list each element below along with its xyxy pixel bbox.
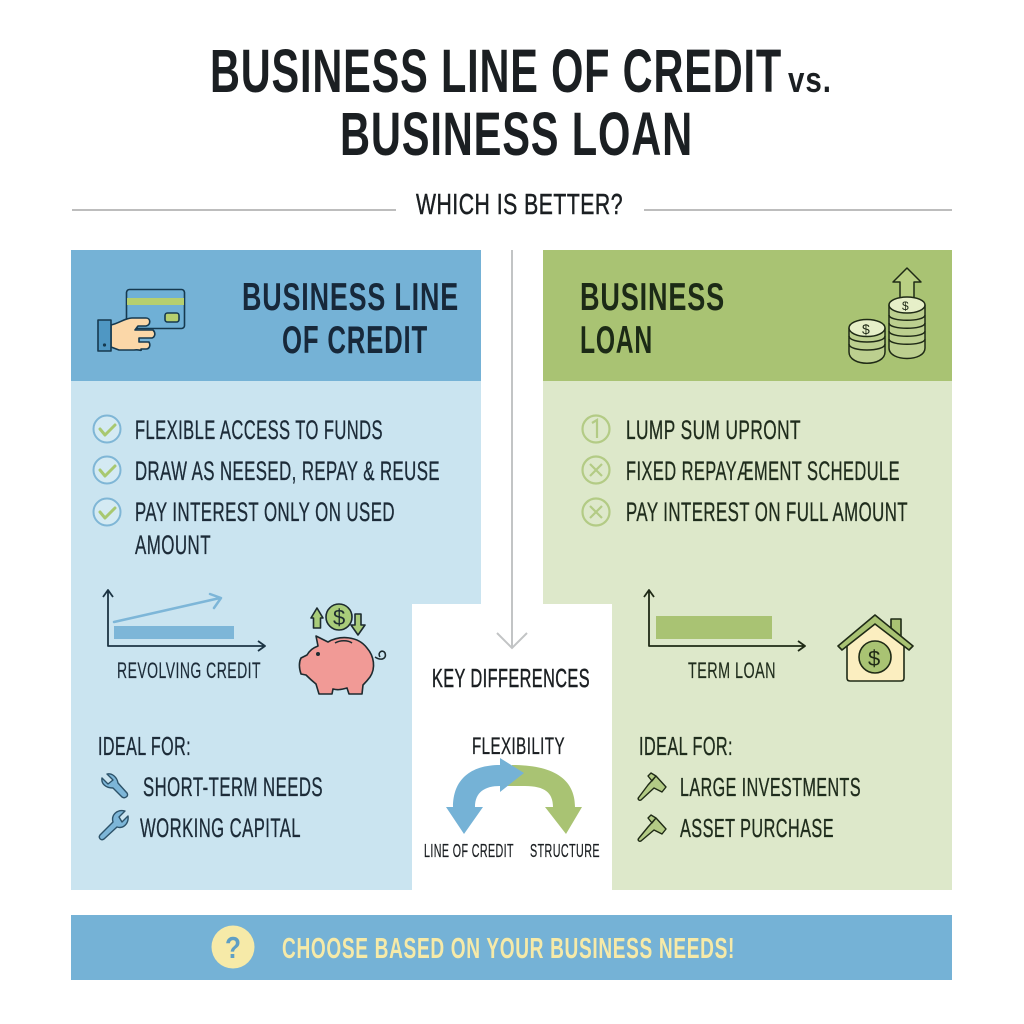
heading: business loan: BUSINESS bbox=[580, 276, 725, 319]
heading: business line of credit: BUSINESS LINE bbox=[242, 276, 459, 319]
feature list: line of credit: AMOUNT bbox=[135, 530, 211, 560]
heading: key differences: KEY DIFFERENCES bbox=[432, 663, 590, 693]
icon: house with dollar: $ bbox=[868, 646, 880, 671]
icon: spanner bbox=[99, 811, 128, 840]
ideal for: business loan: IDEAL FOR: bbox=[639, 731, 733, 761]
heading: business loan bbox=[580, 276, 725, 362]
footer banner bbox=[71, 915, 952, 980]
panel header: business loan bbox=[543, 250, 952, 381]
panel: key differences bbox=[424, 663, 600, 861]
icon: hammer bbox=[638, 773, 666, 800]
icon: wrench bbox=[102, 774, 128, 798]
chart: term loan: TERM LOAN bbox=[688, 658, 776, 683]
arrow: center divider bbox=[497, 250, 527, 648]
feature list: line of credit: DRAW AS NEESED, REPAY & REUSE bbox=[135, 456, 440, 486]
panel header: line of credit bbox=[71, 250, 481, 381]
label: flexibility: FLEXIBILITY bbox=[472, 733, 565, 760]
feature list: line of credit: PAY INTEREST ONLY ON USED bbox=[135, 497, 395, 527]
arrow: blue line of credit bbox=[446, 758, 524, 834]
heading: business line of credit: OF CREDIT bbox=[282, 319, 428, 362]
title: BUSINESS LOAN bbox=[340, 100, 693, 168]
icon: piggy bank: $ bbox=[333, 605, 345, 630]
ideal for: line of credit: IDEAL FOR: bbox=[98, 731, 191, 761]
ideal for: line of credit: WORKING CAPITAL bbox=[140, 813, 301, 843]
label: structure: STRUCTURE bbox=[530, 841, 600, 861]
subtitle: which is better: WHICH IS BETTER? bbox=[416, 189, 623, 221]
label: line of credit: LINE OF CREDIT bbox=[424, 841, 514, 861]
title: vs. bbox=[788, 59, 832, 100]
panel: business loan bbox=[543, 250, 952, 890]
icon: coin stacks with arrow: $ bbox=[862, 321, 870, 337]
ideal for: business loan: LARGE INVESTMENTS bbox=[680, 772, 861, 802]
arrow: green structure bbox=[505, 765, 582, 834]
callout text: CHOOSE BASED ON YOUR BUSINESS NEEDS! bbox=[282, 933, 735, 965]
icon: question mark: ? bbox=[225, 930, 241, 965]
chart: revolving credit: REVOLVING CREDIT bbox=[117, 658, 261, 683]
ideal for: business loan: ASSET PURCHASE bbox=[680, 813, 834, 843]
panel: business line of credit bbox=[71, 250, 481, 890]
ideal for: line of credit bbox=[98, 731, 323, 843]
title bbox=[210, 37, 832, 168]
chart: revolving credit bbox=[103, 590, 265, 683]
icon: house with dollar bbox=[838, 615, 913, 681]
ideal for: line of credit: SHORT-TERM NEEDS bbox=[143, 772, 323, 802]
icon: question mark bbox=[212, 926, 254, 968]
ideal for: business loan bbox=[638, 731, 861, 843]
icon: coin stacks with arrow: $ bbox=[902, 299, 909, 313]
feature list: line of credit: FLEXIBLE ACCESS TO FUNDS bbox=[135, 415, 383, 445]
chart: term loan bbox=[644, 590, 805, 683]
feature list: line of credit bbox=[94, 415, 440, 560]
icon: hand holding credit card bbox=[98, 290, 184, 351]
feature list: business loan bbox=[582, 415, 908, 527]
heading: business line of credit bbox=[242, 276, 459, 362]
icon: coin stacks with arrow bbox=[849, 268, 925, 363]
heading: business loan: LOAN bbox=[580, 319, 653, 362]
icon: piggy bank bbox=[300, 604, 385, 694]
icon: hammer bbox=[638, 815, 666, 841]
feature list: business loan: LUMP SUM UPRONT bbox=[626, 415, 801, 445]
